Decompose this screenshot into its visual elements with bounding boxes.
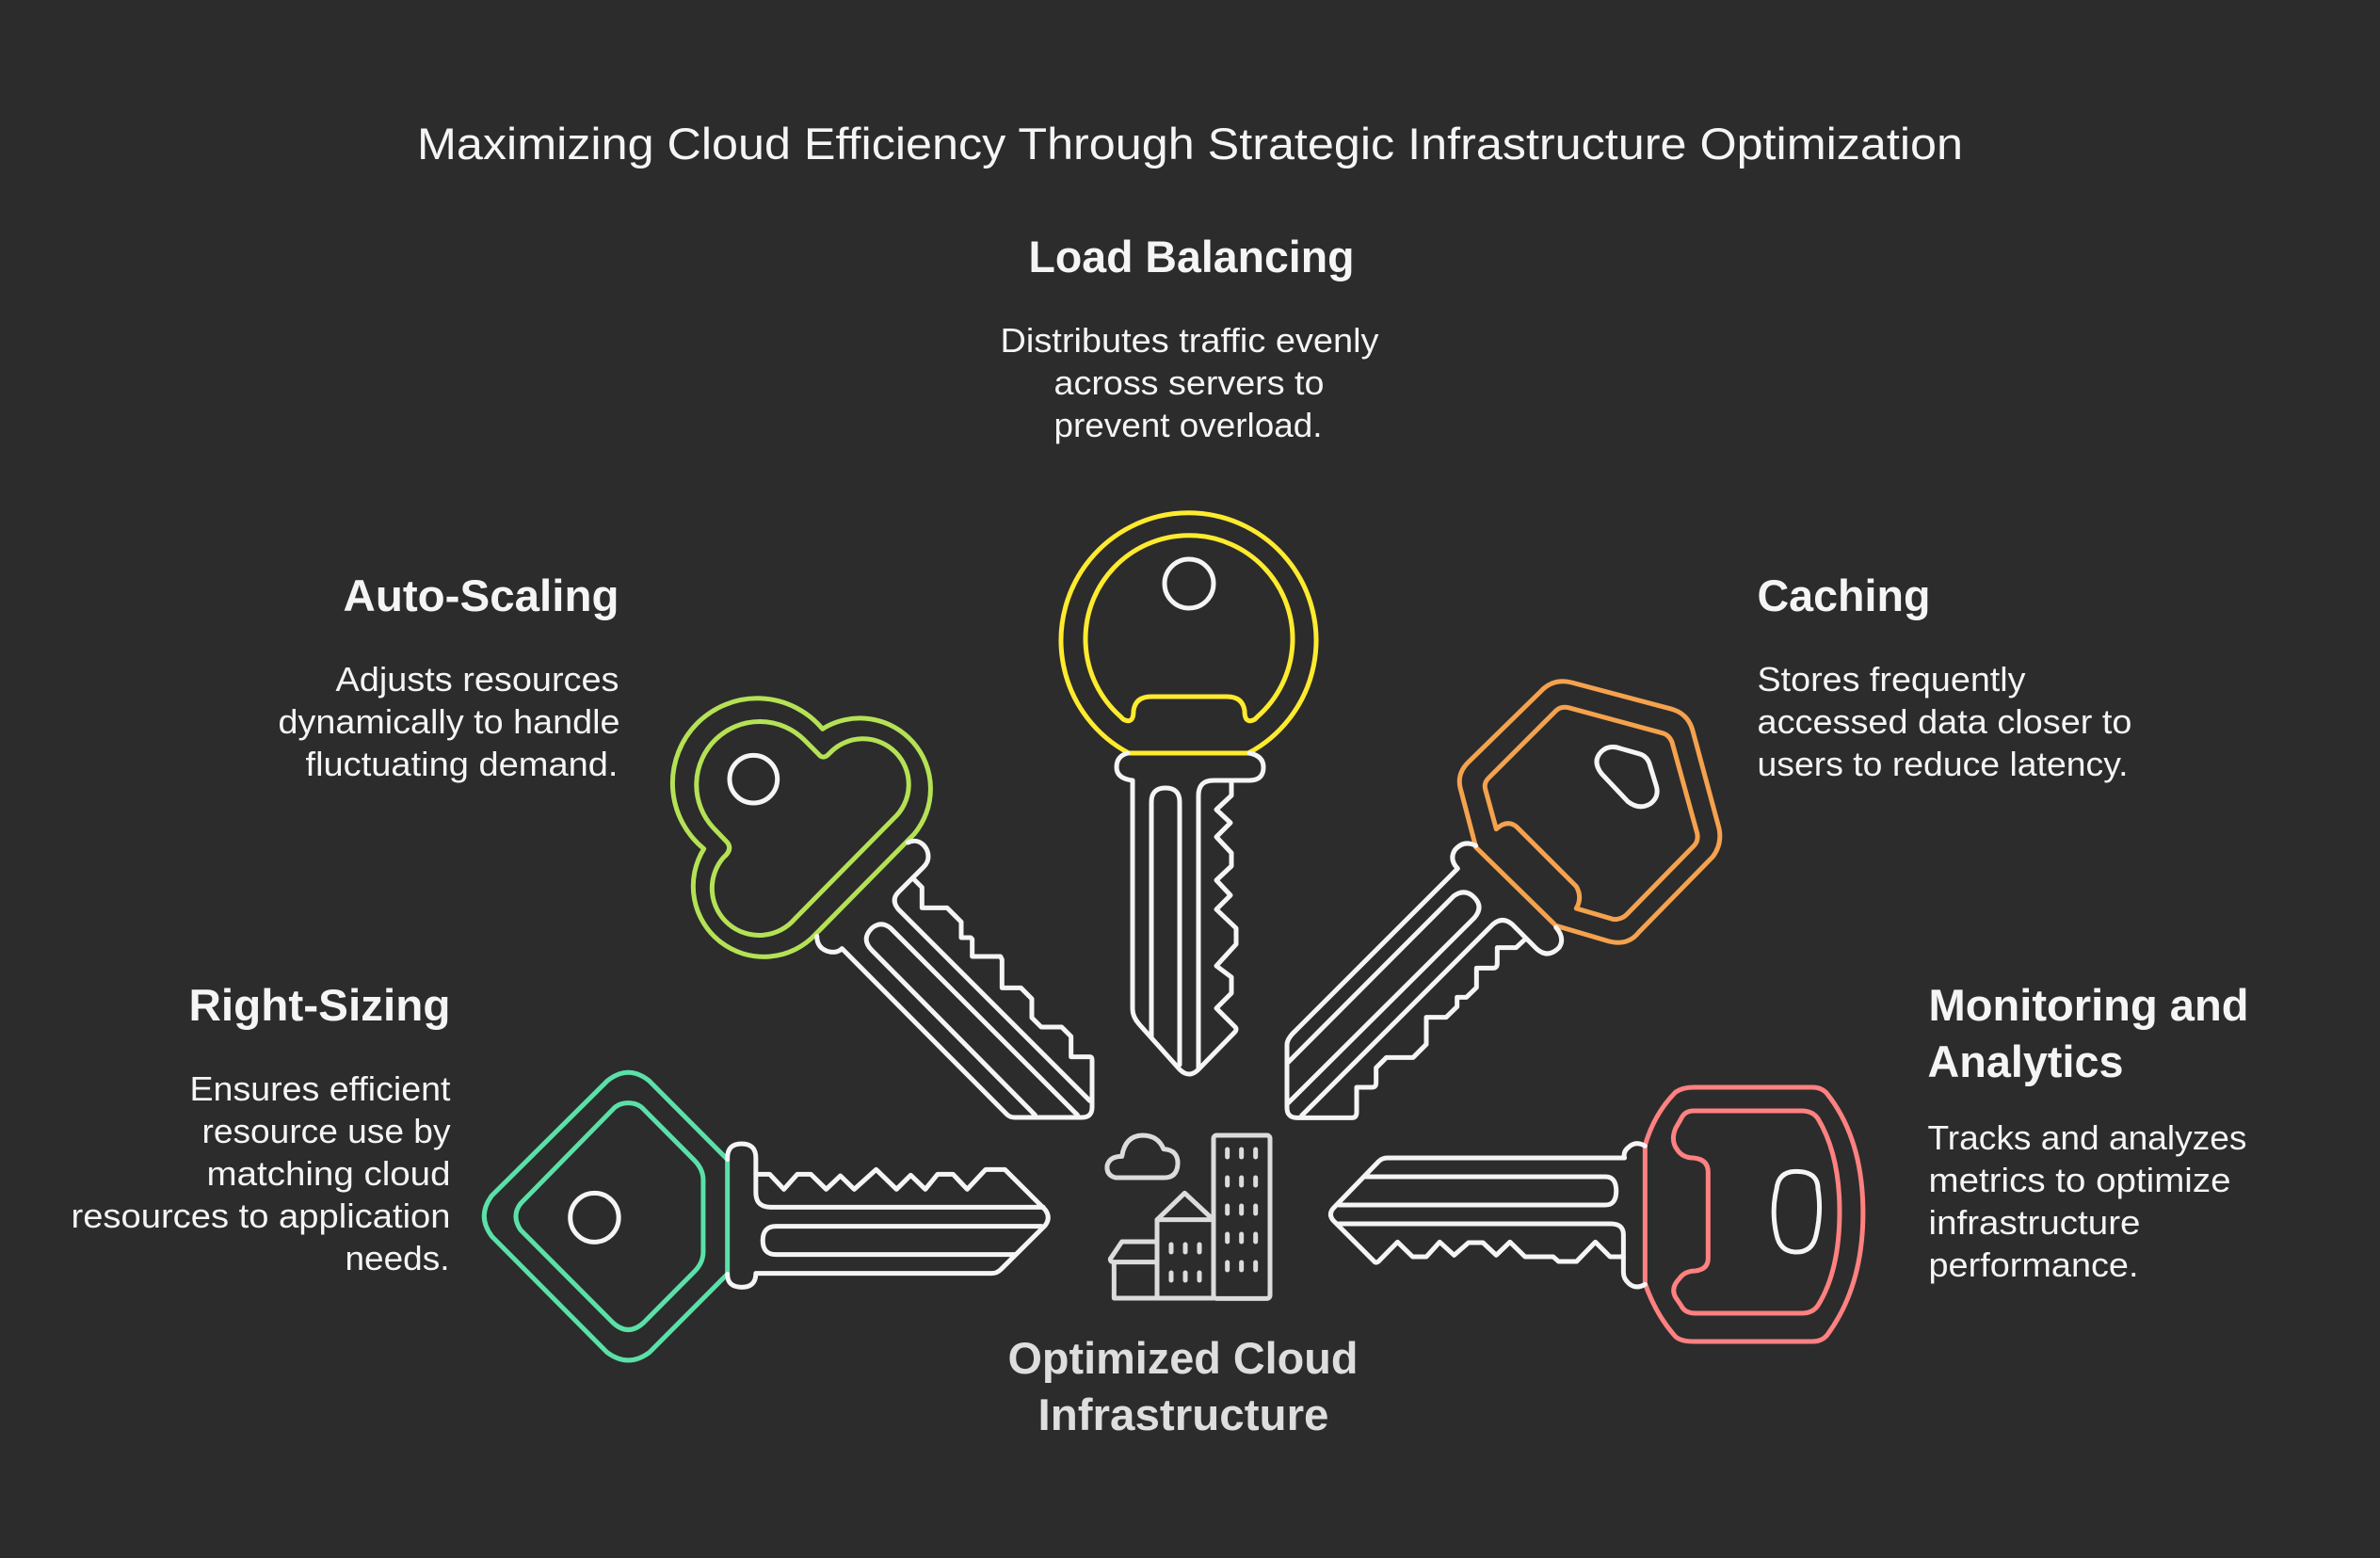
text block: Auto-Scaling — [279, 570, 619, 783]
key blade: pink — [1330, 1144, 1820, 1287]
text block: Auto-Scaling: Adjusts resources — [335, 660, 619, 699]
icon: pink key — [1330, 1087, 1863, 1341]
text block: Monitoring and Analytics: infrastructure — [1928, 1203, 2141, 1242]
text block: Load Balancing: Distributes traffic evenly — [1000, 321, 1378, 360]
key head: teal — [484, 1072, 728, 1360]
text block: Monitoring and Analytics: Monitoring and — [1928, 980, 2248, 1030]
heading: Optimized Cloud Infrastructure — [1007, 1333, 1358, 1439]
icon: orange key — [1287, 682, 1720, 1117]
tall building — [1214, 1135, 1270, 1298]
text block: Auto-Scaling: Auto-Scaling — [343, 570, 619, 620]
text block: Right-Sizing: Ensures efficient — [190, 1069, 450, 1108]
middle building — [1157, 1193, 1214, 1298]
text block: Caching: Stores frequently — [1757, 660, 2026, 699]
key blade: yellow — [1117, 559, 1263, 1074]
key blade: teal — [571, 1144, 1048, 1287]
text block: Right-Sizing: Right-Sizing — [188, 980, 450, 1030]
text block: Right-Sizing: needs. — [345, 1239, 450, 1277]
text block: Monitoring and Analytics: Analytics — [1928, 1036, 2124, 1086]
key head: yellow — [1061, 513, 1316, 753]
text block: Auto-Scaling: fluctuating demand. — [305, 745, 618, 783]
icon: green key — [672, 699, 1092, 1117]
text block: Monitoring and Analytics — [1928, 980, 2248, 1284]
text block: Caching: users to reduce latency. — [1757, 745, 2128, 783]
small building — [1110, 1242, 1214, 1298]
key blade: orange — [1287, 747, 1657, 1117]
icon: city with cloud — [1107, 1135, 1270, 1298]
heading: Optimized Cloud Infrastructure: Infrastructure — [1037, 1389, 1329, 1439]
icon: yellow key — [1061, 513, 1316, 1074]
text block: Load Balancing — [1000, 232, 1378, 444]
text block: Right-Sizing: resource use by — [201, 1112, 450, 1150]
text block: Monitoring and Analytics: Tracks and analyzes — [1928, 1118, 2246, 1157]
text block: Caching: accessed data closer to — [1757, 702, 2131, 741]
cloud — [1107, 1135, 1178, 1178]
text block: Right-Sizing: matching cloud — [207, 1154, 450, 1193]
text block: Load Balancing: Load Balancing — [1028, 232, 1354, 281]
text block: Monitoring and Analytics: metrics to optimize — [1928, 1161, 2231, 1199]
text block: Caching: Caching — [1757, 570, 1930, 620]
heading: Optimized Cloud Infrastructure: Optimized Cloud — [1007, 1333, 1358, 1383]
key head: orange — [1459, 682, 1720, 942]
text block: Right-Sizing — [72, 980, 450, 1277]
title: Maximizing Cloud Efficiency Through Strategic Infrastructure Optimization — [417, 119, 1963, 169]
icon: teal key — [484, 1072, 1048, 1360]
text block: Monitoring and Analytics: performance. — [1928, 1245, 2139, 1284]
text block: Load Balancing: prevent overload. — [1054, 406, 1322, 444]
key blade: green — [730, 755, 1092, 1117]
key head: green — [672, 699, 930, 956]
text block: Caching — [1757, 570, 2131, 783]
text block: Load Balancing: across servers to — [1054, 363, 1324, 402]
key head: pink — [1645, 1087, 1863, 1341]
text block: Right-Sizing: resources to application — [72, 1197, 450, 1235]
text block: Auto-Scaling: dynamically to handle — [279, 702, 619, 741]
